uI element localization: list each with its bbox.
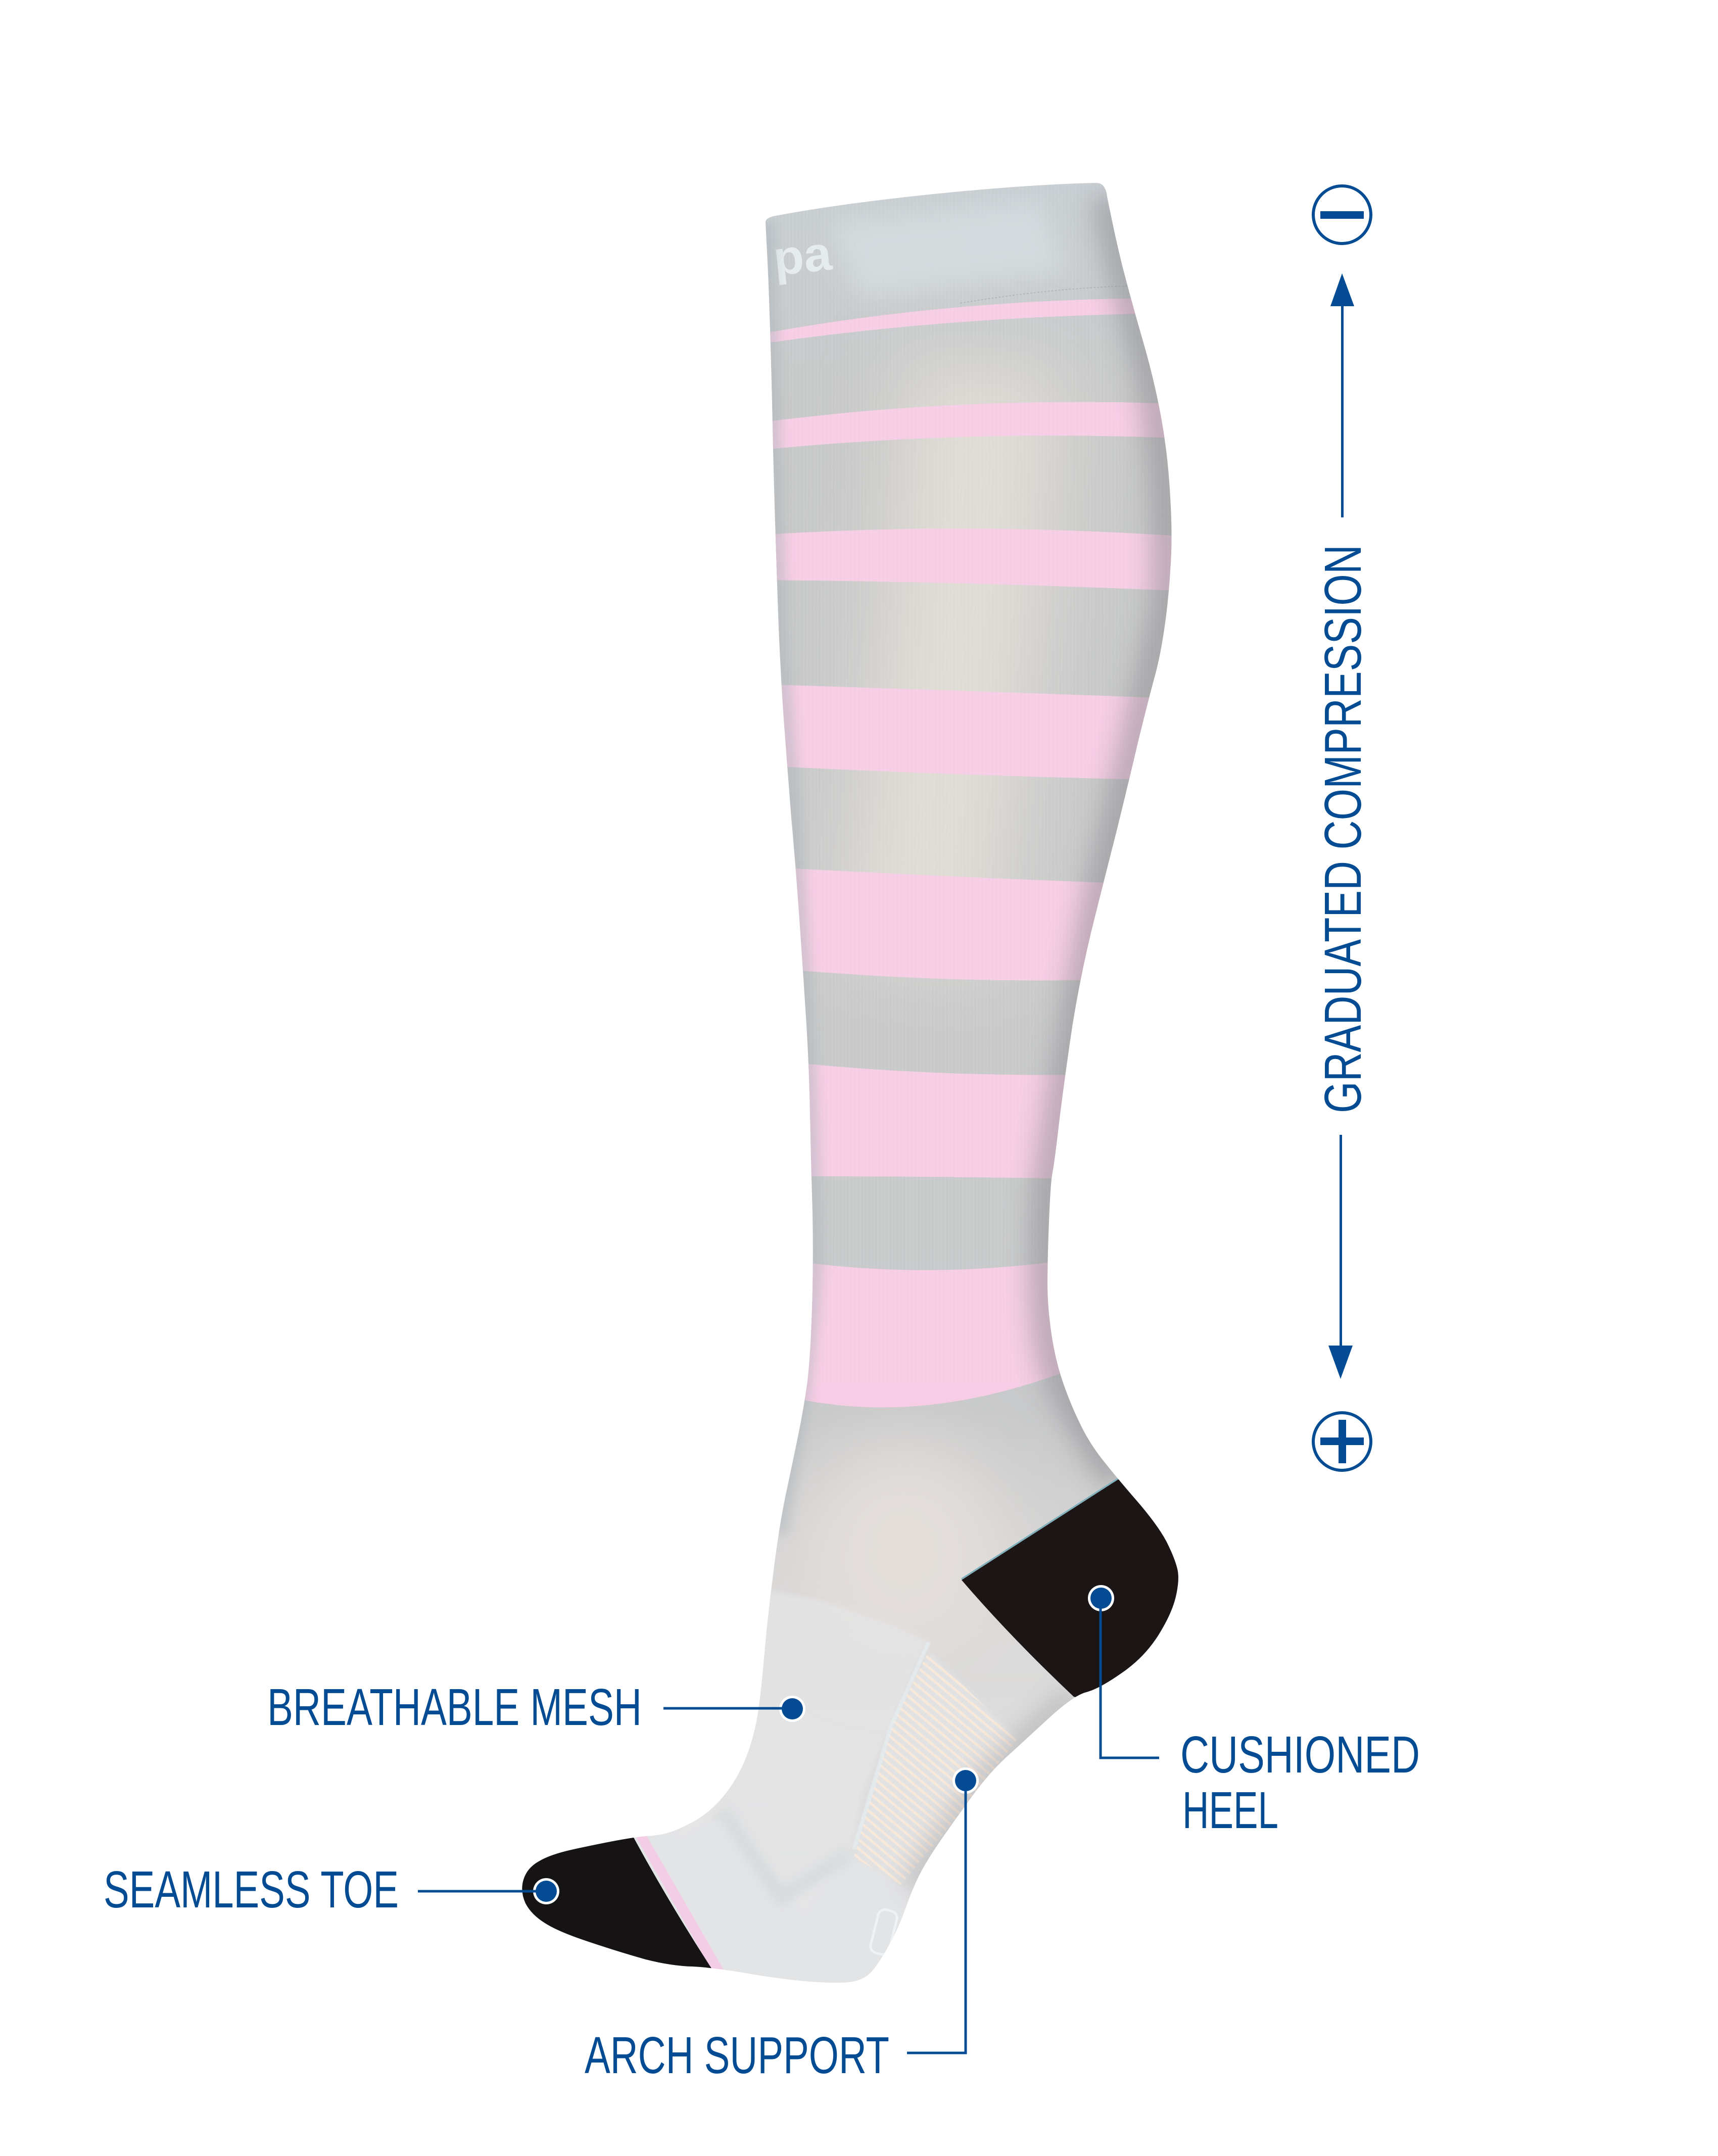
arch edge highlight: [854, 1642, 929, 1849]
icon: minus in circle: [1313, 186, 1371, 244]
arch support ribbing: [854, 1651, 1018, 1885]
breathable mesh panel: [677, 1589, 929, 1910]
arrow: down: [1328, 1135, 1353, 1379]
callout: arch support: [585, 1767, 979, 2084]
fine knit texture: [758, 172, 1187, 1384]
right edge shading: [1046, 197, 1169, 1479]
callout: seamless toe: SEAMLESS TOE: [104, 1860, 399, 1919]
toe pink stripe: [632, 1829, 724, 1971]
label: graduated compression: GRADUATED COMPRESSION: [1314, 545, 1372, 1113]
warm fabric highlight on calf: [915, 364, 985, 960]
arch support panel: [854, 1651, 1018, 1885]
callout: cushioned heel: HEEL: [1182, 1781, 1278, 1839]
infographic: compression sock with feature callouts: [105, 183, 1418, 2074]
top cuff highlight: [829, 202, 1066, 298]
pink stripes: [753, 298, 1187, 1407]
warm fabric highlight on ankle: [810, 1430, 999, 1607]
sock base fabric: [669, 183, 1178, 1923]
callout: cushioned heel: CUSHIONED: [1180, 1726, 1420, 1784]
heel edge thread: [962, 1478, 1118, 1579]
sock: [505, 172, 1223, 2001]
foot sole panel: [627, 1819, 910, 1996]
cuff logo: pa: [771, 226, 834, 286]
mesh seam chevron: [723, 1810, 849, 1897]
icon: plus in circle: [1313, 1413, 1371, 1470]
callout: breathable mesh: BREATHABLE MESH: [267, 1678, 642, 1736]
heel reinforcement: [962, 1479, 1223, 1728]
toe reinforcement: [505, 1819, 713, 2001]
callout: arch support: ARCH SUPPORT: [585, 2026, 889, 2084]
sole edge shading: [913, 1695, 1074, 1888]
cuff seam: [960, 286, 1129, 303]
arrow: up: [1330, 273, 1354, 517]
callout: cushioned heel: [1088, 1585, 1420, 1839]
graduated compression scale: [1313, 186, 1372, 1470]
left edge shading: [766, 222, 814, 1532]
foot logo mark: [869, 1908, 898, 1956]
